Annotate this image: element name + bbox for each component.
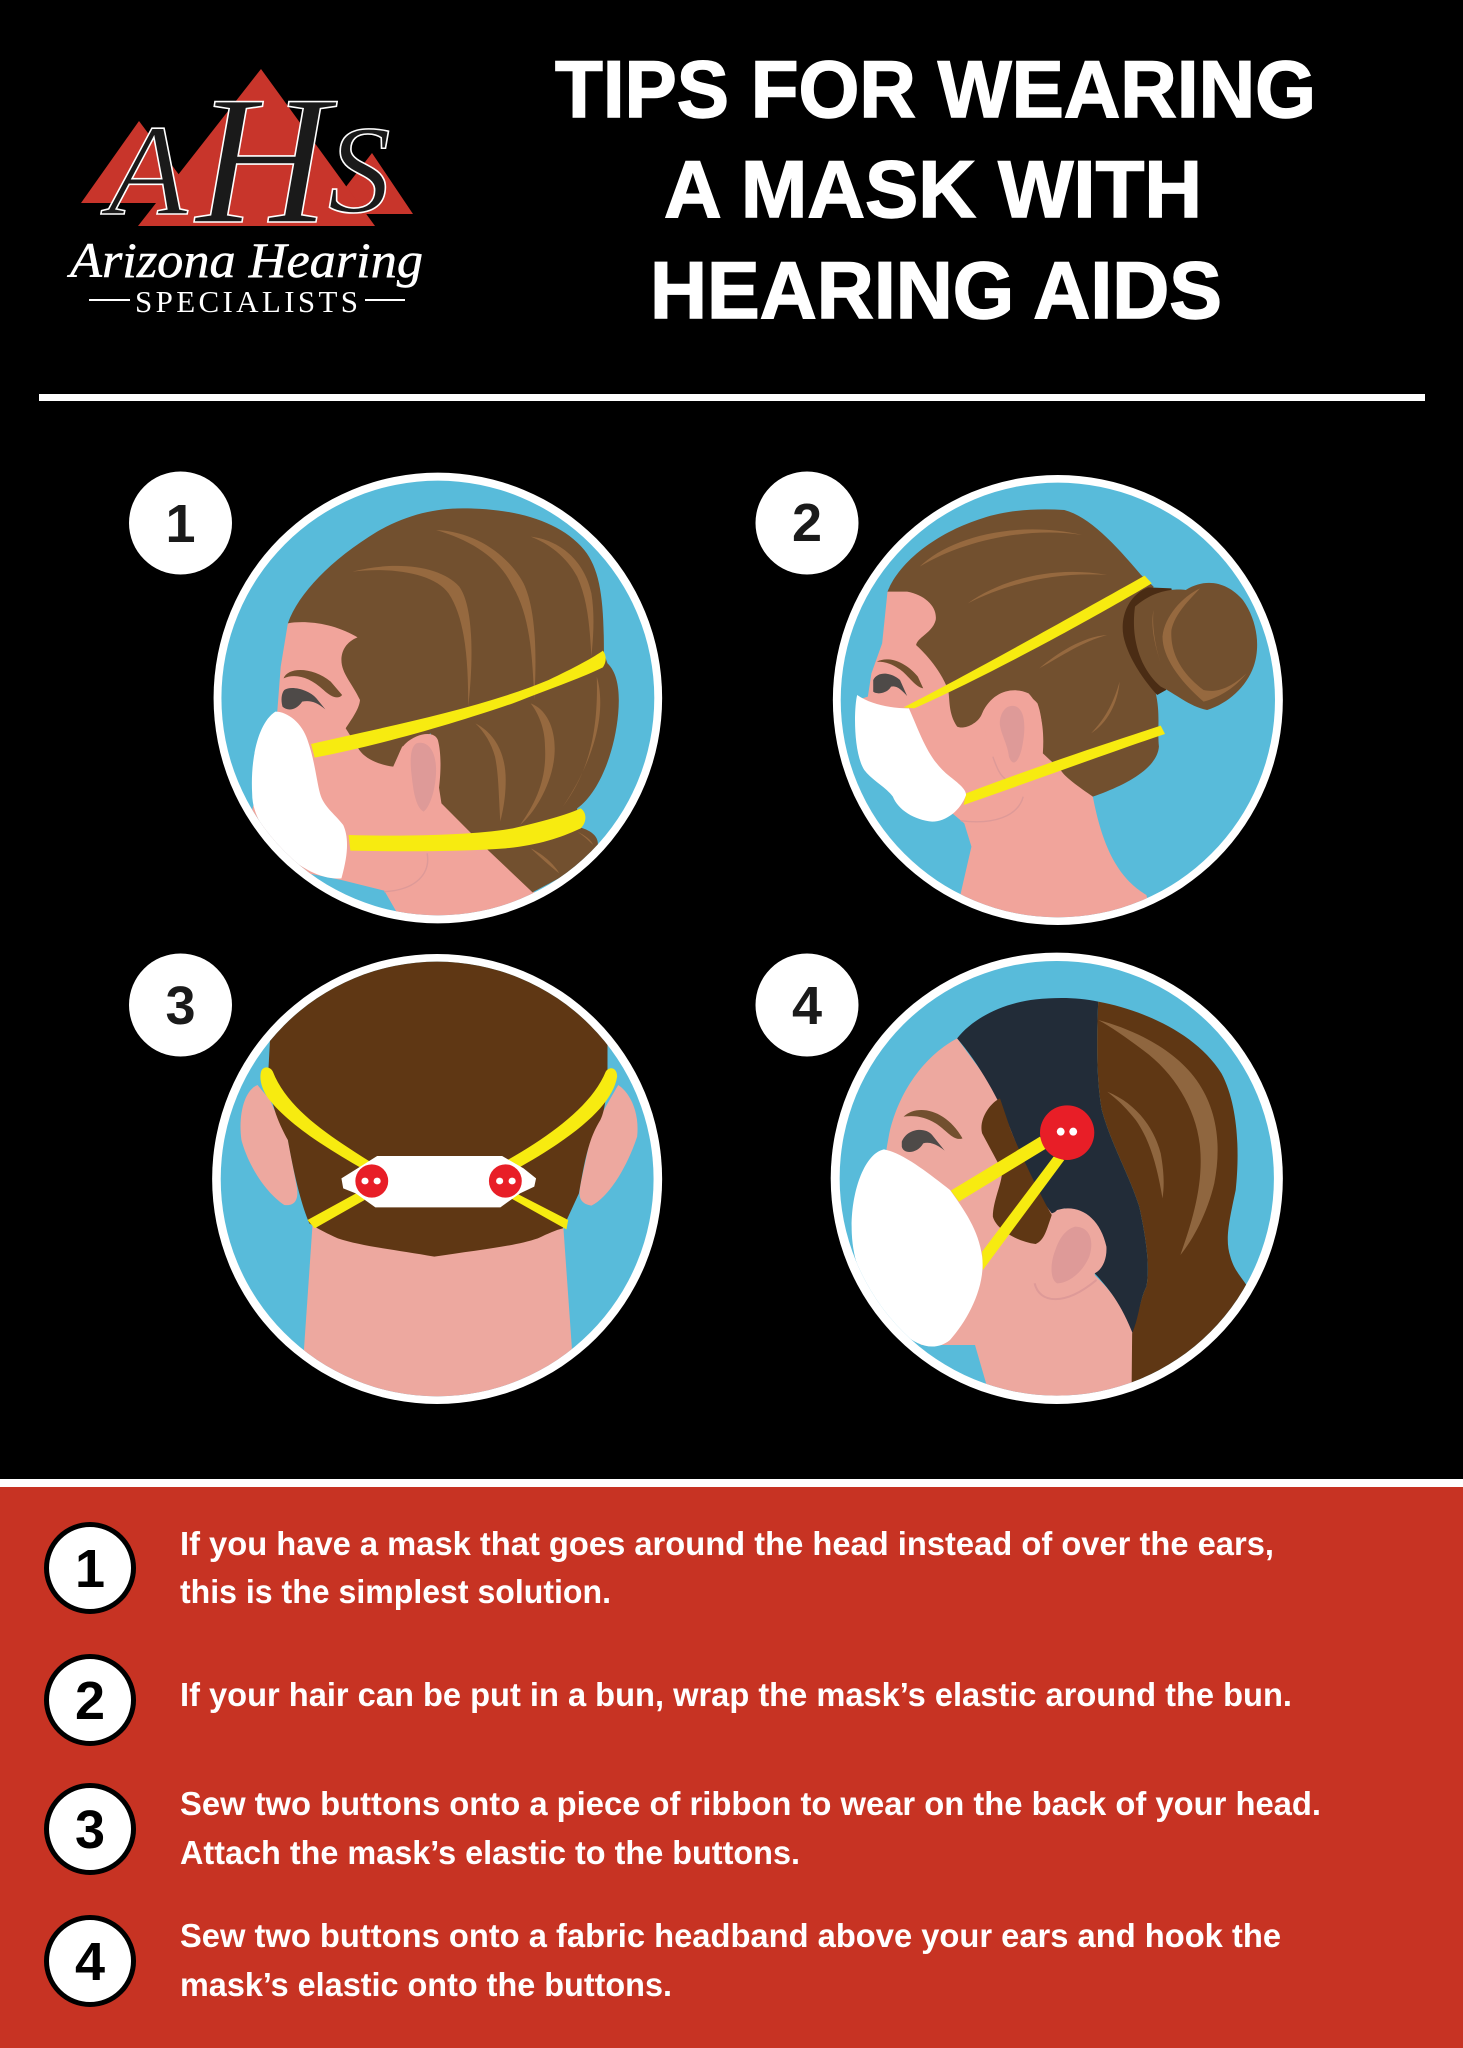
neck <box>304 1220 574 1407</box>
number badge 3 <box>129 954 232 1056</box>
logo subtitle: SPECIALISTS <box>135 284 358 319</box>
tip 1 text: this is the simplest solution. <box>180 1573 611 1610</box>
hair highlights <box>1098 1020 1218 1255</box>
panel: illustration 2, elastic around the bun <box>833 475 1283 927</box>
back hair <box>1097 1002 1250 1407</box>
tip 4 badge: 4 <box>75 1932 105 1992</box>
mask <box>855 695 966 822</box>
button left <box>355 1164 388 1198</box>
button right <box>489 1164 522 1198</box>
tip 4 badge <box>46 1918 134 2004</box>
ears <box>241 1085 297 1205</box>
panel: tips list <box>0 1479 1463 2048</box>
tip 3 text: Sew two buttons onto a piece of ribbon to wear on the back of your head. <box>180 1785 1321 1822</box>
eyebrow <box>877 659 923 688</box>
bun shadow <box>1122 587 1172 695</box>
number badge 2 <box>756 472 858 574</box>
ribbon <box>341 1156 536 1207</box>
logo monogram: S <box>328 102 390 240</box>
title: A MASK WITH <box>664 145 1202 235</box>
hair highlights <box>920 529 1246 733</box>
eyebrow <box>284 670 342 697</box>
logo name: Arizona Hearing <box>67 232 423 288</box>
ear <box>399 734 440 788</box>
tip 4 text: mask’s elastic onto the buttons. <box>180 1966 672 2003</box>
panel: illustration 3, ribbon with two buttons <box>212 947 662 1407</box>
title: HEARING AIDS <box>650 246 1222 336</box>
tip 3 badge: 3 <box>75 1800 105 1860</box>
skin <box>886 1038 1134 1396</box>
title: TIPS FOR WEARING <box>555 45 1316 135</box>
hair <box>268 947 607 1257</box>
number badge 1 <box>129 472 232 574</box>
tip 3 text: Attach the mask’s elastic to the buttons. <box>180 1834 800 1871</box>
mask <box>252 712 347 879</box>
ear <box>1033 699 1042 723</box>
tip 3 text <box>180 1785 1321 1871</box>
panel: illustration 4, fabric headband with buttons <box>831 953 1283 1407</box>
number badge 2: 2 <box>792 493 822 553</box>
number badge 1: 1 <box>165 494 196 554</box>
tip 2 badge: 2 <box>75 1671 105 1731</box>
tip 1 badge <box>46 1524 134 1612</box>
hair highlights <box>352 530 600 873</box>
straps <box>311 651 606 758</box>
bun <box>1134 583 1257 710</box>
tip 1 text <box>180 1525 1274 1610</box>
title <box>555 45 1316 336</box>
number badge 4: 4 <box>792 976 822 1036</box>
panel: illustration 1, mask around the head <box>214 473 662 927</box>
logo monogram: A <box>100 99 188 243</box>
mask <box>852 1149 983 1347</box>
eyebrow <box>904 1110 962 1139</box>
logo: Arizona Hearing Specialists <box>67 58 423 319</box>
eye <box>282 688 325 709</box>
number badge 4 <box>756 954 858 1056</box>
eye <box>873 674 907 696</box>
straps <box>260 1067 617 1229</box>
tip 4 text: Sew two buttons onto a fabric headband above your ears and hook the <box>180 1917 1281 1954</box>
logo monogram: H <box>194 58 338 262</box>
ear <box>1051 1208 1106 1276</box>
tip 2 text: If your hair can be put in a bun, wrap the mask’s elastic around the bun. <box>180 1676 1292 1713</box>
logo triangles <box>81 69 413 226</box>
straps <box>904 576 1152 708</box>
logo monogram <box>100 58 390 262</box>
tip 1 badge: 1 <box>75 1539 105 1599</box>
skin <box>857 587 1154 927</box>
hair <box>887 509 1159 797</box>
tip 1 text: If you have a mask that goes around the head instead of over the ears, <box>180 1525 1274 1562</box>
hair <box>288 508 619 892</box>
eye <box>902 1130 945 1152</box>
number badge 3: 3 <box>165 976 196 1036</box>
tip 3 badge <box>46 1786 134 1872</box>
button <box>1040 1105 1094 1160</box>
straps <box>951 1137 1046 1202</box>
tip 4 text <box>180 1917 1281 2003</box>
sideburn <box>981 1098 1052 1244</box>
tip 2 badge <box>46 1656 134 1744</box>
skin <box>252 617 541 927</box>
headband <box>957 998 1148 1337</box>
